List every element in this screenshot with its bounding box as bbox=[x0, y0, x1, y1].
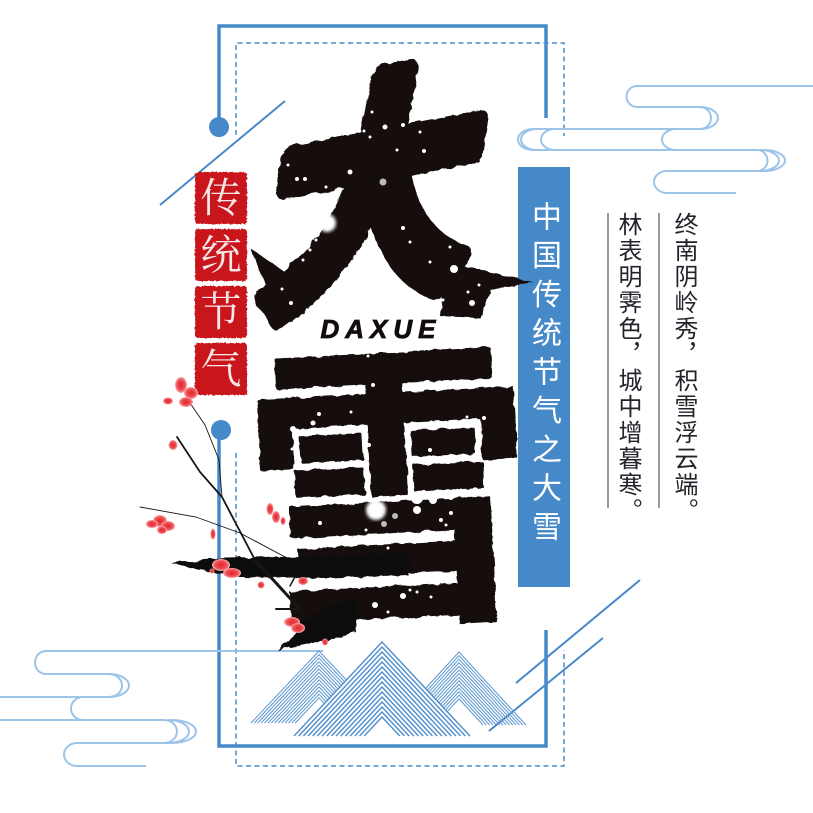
seal text bbox=[200, 175, 242, 392]
cloud: bottom left bbox=[0, 651, 323, 766]
seal text: 统 bbox=[200, 232, 242, 278]
calligraphy title: 雪: 雪 bbox=[238, 321, 543, 670]
poem text: second line: 林表明霁色，城中增暮寒。 bbox=[614, 212, 641, 524]
seal text: 气 bbox=[200, 346, 242, 392]
plum blossom branch bbox=[140, 377, 410, 651]
flower: top bbox=[163, 377, 198, 450]
mountain: right bbox=[392, 652, 526, 725]
diagonal accent lines bbox=[160, 101, 640, 731]
flower: right bbox=[266, 503, 308, 585]
red seal panel bbox=[195, 172, 247, 395]
mountains bbox=[251, 642, 526, 736]
seal text: 节 bbox=[200, 289, 242, 335]
snow speckles bbox=[280, 110, 486, 614]
title panel text: 中国传统节气之大雪 bbox=[527, 201, 560, 550]
flower: left bbox=[146, 515, 216, 540]
poem line divider: right bbox=[658, 213, 660, 508]
mountain: centre bbox=[294, 642, 470, 736]
seal backgrounds bbox=[195, 172, 247, 395]
frame node dots bbox=[209, 117, 231, 440]
mountain: left bbox=[251, 651, 387, 723]
flower: bottom bbox=[284, 617, 328, 646]
poem text: first line: 终南阴岭秀，积雪浮云端。 bbox=[670, 212, 697, 524]
seal text: 传 bbox=[200, 175, 242, 221]
ink brush sweep bbox=[170, 552, 410, 578]
blue title panel bbox=[518, 167, 570, 587]
ink flourishes: 大 bbox=[250, 248, 533, 318]
solid blue frame bbox=[219, 26, 546, 746]
flower: centre bbox=[210, 559, 264, 588]
subtitle: DAXUE: DAXUE bbox=[320, 314, 442, 344]
cloud: top right bbox=[518, 86, 813, 193]
lower ink splash bbox=[278, 600, 358, 651]
calligraphy title: 大: 大 bbox=[248, 41, 502, 355]
branches bbox=[140, 400, 300, 609]
poem line divider: left bbox=[607, 213, 608, 508]
dashed blue frame bbox=[236, 43, 564, 766]
